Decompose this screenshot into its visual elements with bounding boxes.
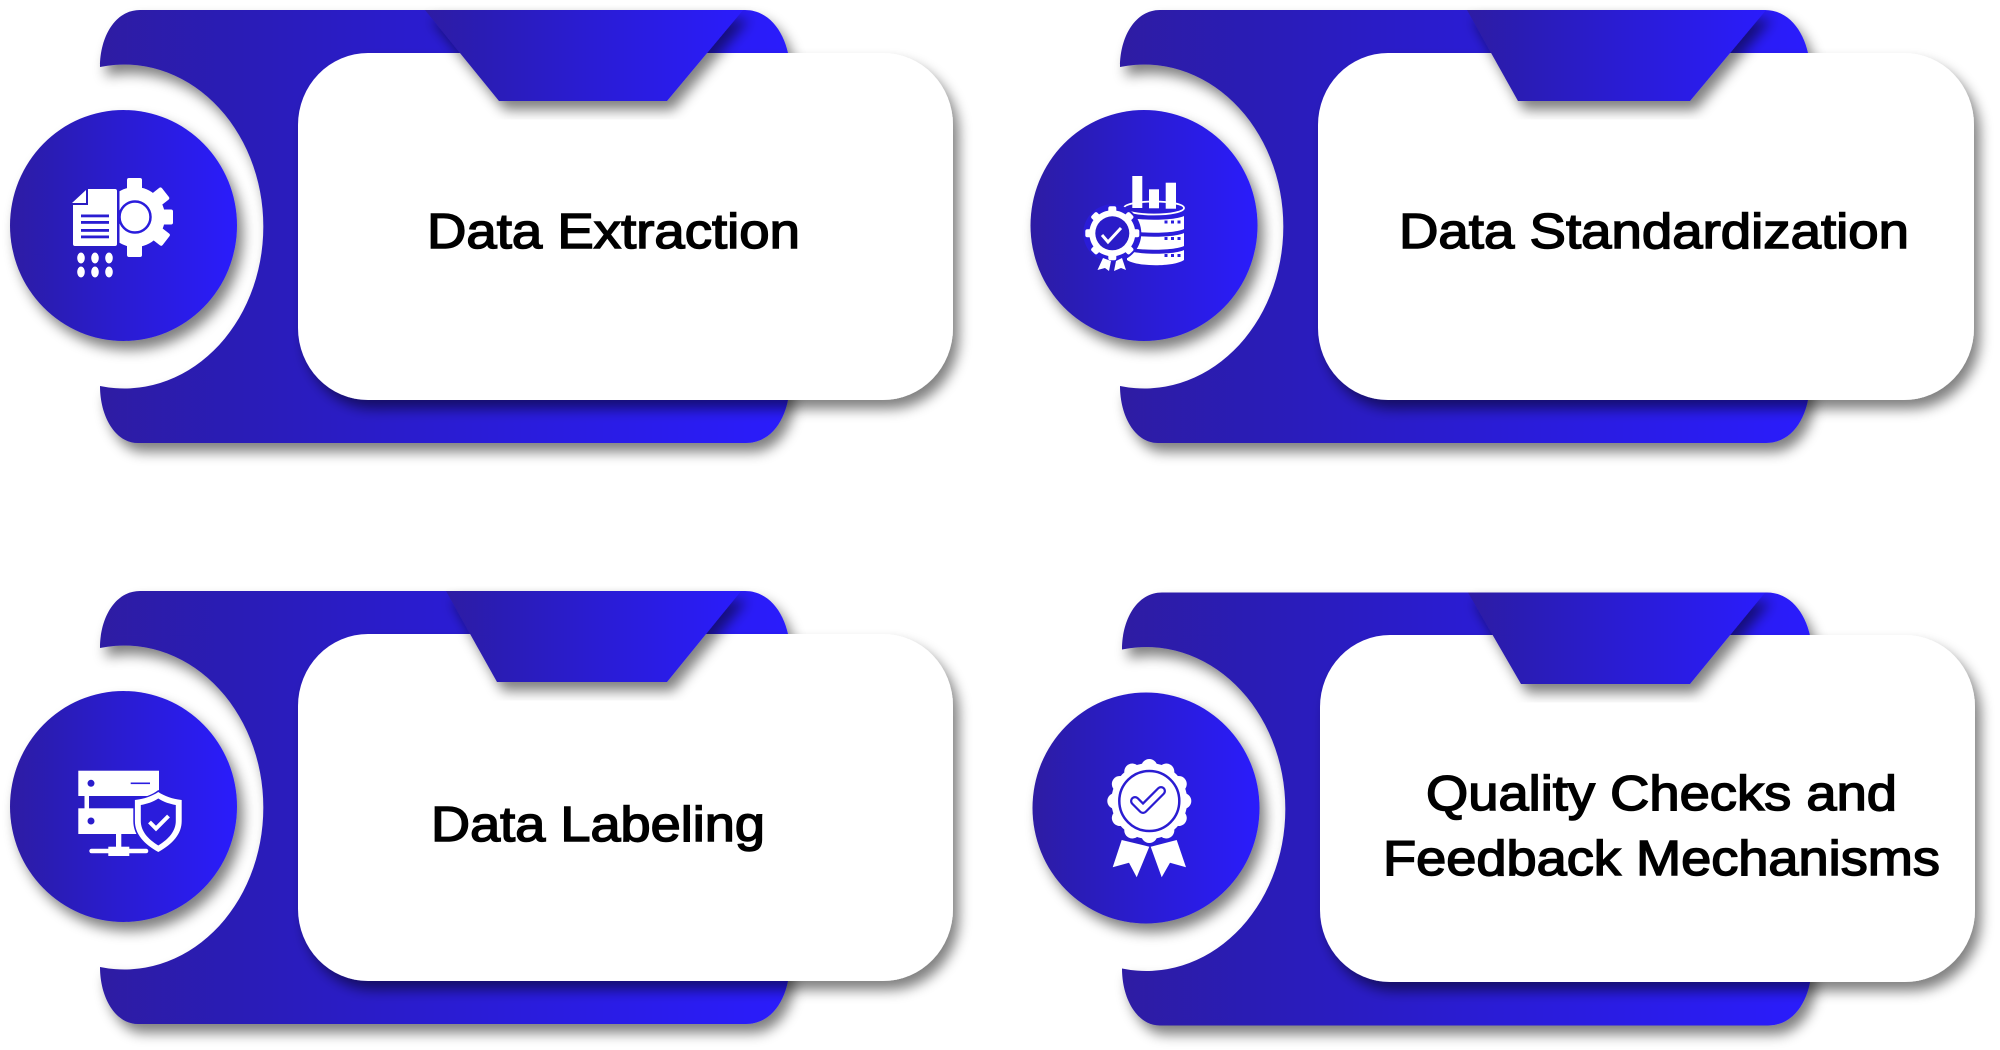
icon: document and gear (72, 178, 173, 278)
label: Data Standardization (1399, 205, 1909, 259)
label (1383, 767, 1940, 886)
white card (1318, 53, 1974, 400)
panel: Data Labeling (10, 591, 953, 1024)
label: Data Extraction (427, 205, 800, 259)
label: Feedback Mechanisms (1383, 832, 1940, 886)
icon circle (10, 110, 237, 341)
backing band (1122, 592, 1810, 1026)
panel: Quality Checks and Feedback Mechanisms (1032, 592, 1975, 1026)
notch tab (425, 10, 743, 101)
icon circle (10, 691, 237, 922)
panel: Data Standardization (1030, 10, 1974, 443)
label: Data Labeling (431, 798, 765, 852)
white card (298, 634, 953, 981)
backing band (100, 10, 788, 443)
panel: Data Extraction (10, 10, 953, 443)
icon: award ribbon badge (1107, 759, 1191, 877)
notch tab (446, 591, 741, 682)
backing band (1120, 10, 1808, 443)
notch tab (1468, 592, 1765, 684)
icon circle (1030, 110, 1258, 341)
white card (298, 53, 953, 400)
icon circle (1032, 692, 1260, 924)
notch tab (1467, 10, 1766, 101)
backing band (100, 591, 788, 1024)
icon: database, bars and badge (1083, 176, 1184, 271)
white card (1320, 635, 1975, 982)
label: Quality Checks and (1426, 767, 1897, 821)
icon: server and shield (78, 771, 183, 856)
